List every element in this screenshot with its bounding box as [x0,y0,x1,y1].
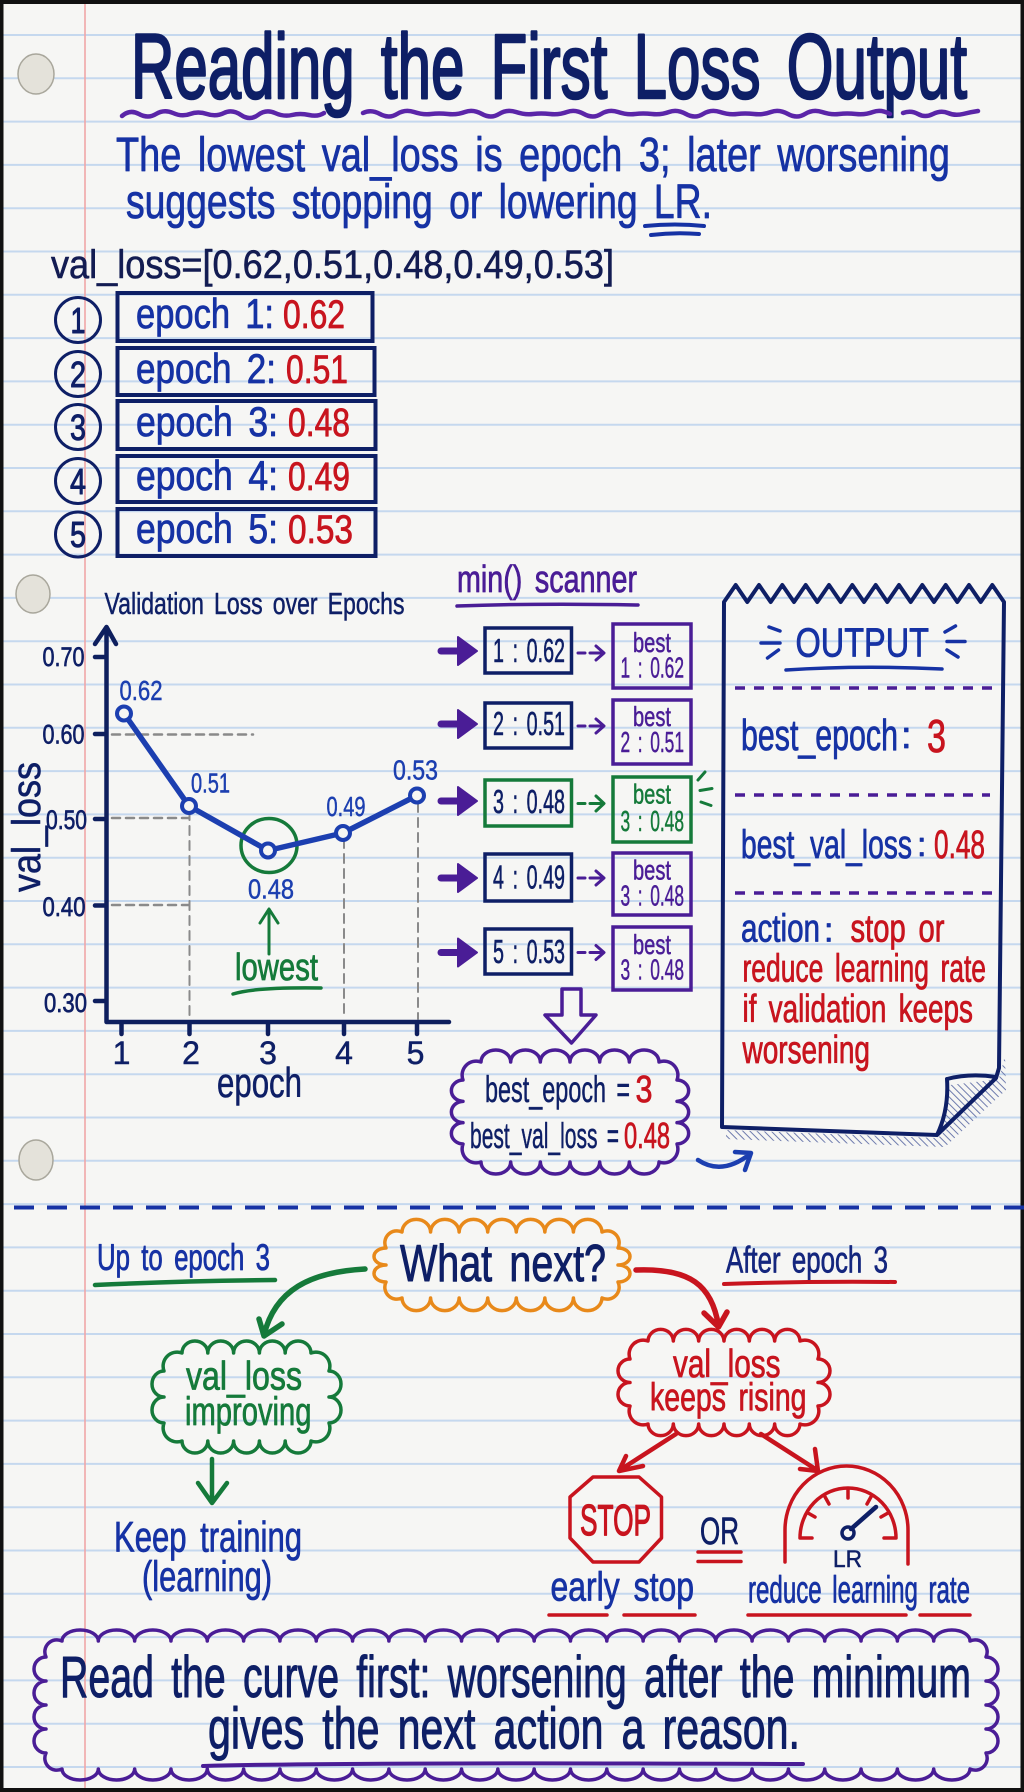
lowest annotation: lowest [235,947,318,989]
val_loss list: val_loss=[0.62,0.51,0.48,0.49,0.53] [51,243,614,287]
y tick labels: 0.70 [42,642,84,672]
scanner row 3 highlighted: best [633,778,671,810]
epoch row 4: epoch 4: [136,452,278,499]
paper outline [722,585,1004,1135]
action text: : [824,912,833,950]
green cloud: val_loss improving: improving [185,1390,312,1434]
scanner row 2: 2 : 0.51 [620,727,684,759]
grid guides [112,734,253,905]
best_epoch line: best_epoch [741,711,898,760]
best_val_loss line: best_val_loss [741,823,912,867]
red cloud: val_loss keeps rising [618,1329,830,1436]
epoch row 2: 0.51 [286,348,348,392]
data labels: 0.51 [191,768,230,798]
data labels [120,675,438,904]
epoch row 4: 0.49 [288,455,350,499]
action text: action [741,908,820,950]
result cloud: 0.48 [624,1115,670,1156]
data labels: 0.62 [120,675,162,706]
arrow: red branch [636,1270,727,1327]
x tick labels: 3 [259,1035,277,1071]
y tick labels: 0.60 [42,720,84,750]
scanner row 4: best [633,854,671,886]
scanner row 4: 4 : 0.49 [493,858,565,896]
y tick labels: 0.40 [42,892,86,922]
up to epoch 3 label [95,1237,275,1285]
epoch row 3: 3 [70,407,86,448]
arrow: green branch [259,1269,365,1336]
action text: worsening [742,1029,870,1072]
scanner row 4 [441,853,691,915]
after epoch 3 label: After epoch 3 [726,1240,888,1280]
best_val_loss line: 0.48 [934,823,985,867]
line chart: validation loss over epochs [5,586,449,1106]
epoch row 4: 4 [70,461,86,502]
keep training text [114,1514,302,1601]
result cloud: best_val_loss = [470,1115,619,1156]
epoch row 5: 0.53 [288,508,353,552]
scanner row 3 highlighted: 3 : 0.48 [620,806,684,838]
or label [698,1511,741,1562]
scanner row 1 [441,624,691,688]
arrow: down to keep training [198,1459,227,1503]
data labels: 0.48 [248,874,294,904]
scanner heading: min() scanner [457,559,637,601]
dashed dividers [735,688,993,893]
epoch row 5: epoch 5: [136,505,278,552]
x axis label: epoch [217,1059,302,1106]
scanner row 1: 1 : 0.62 [493,632,565,669]
scanner row 2 [441,700,691,764]
highlight circle for lowest point [241,818,297,872]
keep training text: Keep training [114,1514,302,1562]
scanner row 4: 3 : 0.48 [620,880,684,912]
green cloud: val_loss improving [152,1341,341,1453]
chart title: Validation Loss over Epochs [104,586,404,621]
loss line [124,714,417,850]
best_epoch line: : [901,715,912,757]
x tick labels [113,1035,424,1071]
red cloud: val_loss keeps rising: keeps rising [650,1376,806,1420]
early stop label: early stop [550,1564,694,1610]
scanner row 3 highlighted: 3 : 0.48 [493,783,565,820]
axes [95,627,449,1034]
keep training text: (learning) [142,1553,272,1601]
best_epoch line: 3 [927,710,946,762]
scanner row 5: best [633,929,671,960]
scanner row 5 [441,927,691,990]
result cloud [451,1050,689,1174]
result cloud: 3 [636,1069,652,1111]
y tick labels [42,642,87,1018]
subtitle: suggests stopping or lowering LR. [126,176,712,229]
epoch row 5: 5 [70,514,86,555]
y tick labels: 0.30 [44,988,87,1018]
epoch row 1: epoch 1: [136,290,274,337]
data labels: 0.53 [393,754,438,786]
action text: stop or [850,908,945,950]
output heading: OUTPUT [796,620,929,666]
min() scanner [441,559,712,1174]
y axis label: val_loss [5,762,49,892]
takeaway cloud: gives the next action a reason. [208,1696,800,1762]
epoch row 2 [56,345,374,396]
action text [741,908,986,1072]
subtitle [116,129,950,235]
epoch row 1: 0.62 [283,293,345,337]
green cloud: val_loss improving: val_loss [186,1354,302,1398]
icon: learning rate gauge: LR [833,1546,862,1573]
output paper panel [722,585,1006,1147]
hollow down arrow [545,989,596,1043]
data labels: 0.49 [326,791,366,822]
epoch row 2: 2 [70,354,86,395]
epoch row 3: 0.48 [288,401,350,445]
x tick labels: 4 [335,1035,353,1071]
best_val_loss line: : [917,826,926,864]
data points [117,706,424,858]
scanner row 1: best [633,627,671,658]
scanner row 5: 3 : 0.48 [620,954,684,986]
epoch row 2: epoch 2: [136,345,276,392]
icon: binder hole middle [16,575,50,613]
scanner row 1: 1 : 0.62 [620,652,684,684]
takeaway cloud [34,1630,998,1780]
paper shadow hatching [726,1055,1006,1147]
what next cloud: What next? [400,1235,606,1293]
x tick labels: 2 [182,1035,200,1071]
scanner row 2: best [633,701,671,732]
x tick labels: 5 [407,1035,424,1071]
y tick labels: 0.50 [46,805,87,835]
epoch row 3 [56,398,376,450]
x tick labels: 1 [113,1035,130,1071]
epoch row 4 [56,452,376,504]
epoch row 1: 1 [70,300,86,341]
icon: stop sign [570,1477,662,1562]
icon: stop sign: STOP [580,1496,651,1545]
epoch row 5 [56,505,376,557]
icon: binder hole bottom [19,1140,53,1180]
scanner row 5: 5 : 0.53 [493,933,565,970]
arrows: red split [619,1434,818,1471]
scanner row 3 highlighted [441,772,712,842]
epoch row 1 [56,290,372,342]
result cloud: best_epoch = [485,1069,630,1110]
arrow to output [698,1152,751,1170]
title wavy underline [122,111,978,118]
lowest annotation [233,909,321,994]
red cloud: val_loss keeps rising: val_loss [673,1343,780,1386]
icon: binder hole top [18,54,54,94]
or label: OR [700,1511,739,1553]
what next cloud [374,1219,630,1311]
up to epoch 3 label: Up to epoch 3 [97,1237,270,1278]
icon: learning rate gauge [785,1466,908,1573]
scanner row 2: 2 : 0.51 [493,705,565,742]
epoch row 3: epoch 3: [136,398,278,445]
